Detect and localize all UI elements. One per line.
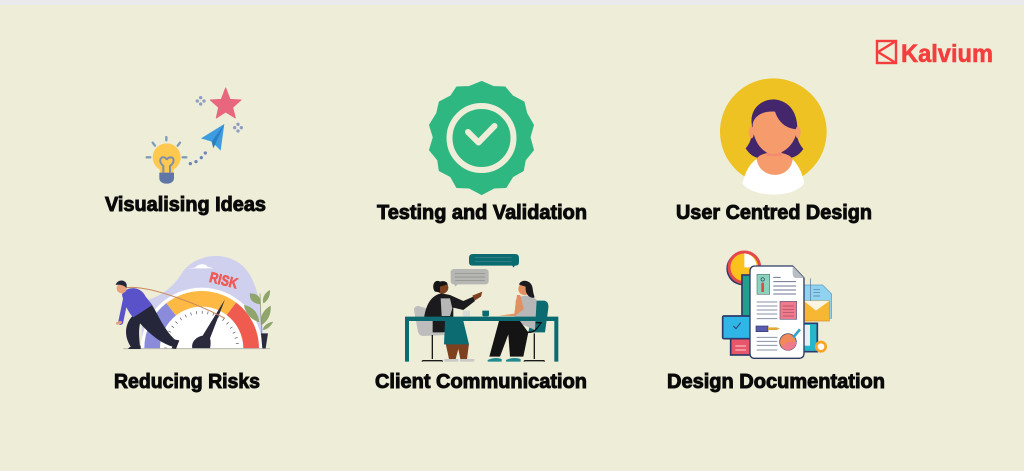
heading: Client Communication: Client Communication: [375, 371, 587, 393]
heading: Design Documentation: Design Documentation: [667, 371, 885, 393]
logo: Kalvium: Kalvium: [901, 40, 993, 68]
icon: light bulb, paper plane and star: [147, 88, 243, 184]
icon: user avatar: [720, 78, 827, 195]
heading: Testing and Validation: Testing and Validation: [377, 202, 587, 224]
heading: Visualising Ideas: Visualising Ideas: [105, 194, 266, 216]
icon: risk gauge with man pulling: RISK: [208, 270, 240, 293]
icon: client meeting at a table: [405, 254, 558, 362]
heading: User Centred Design: User Centred Design: [676, 202, 872, 224]
icon: design documents: [723, 252, 832, 358]
heading: Reducing Risks: Reducing Risks: [114, 371, 260, 393]
icon: green check badge: [430, 82, 534, 194]
icon: risk gauge with man pulling: [116, 256, 273, 349]
